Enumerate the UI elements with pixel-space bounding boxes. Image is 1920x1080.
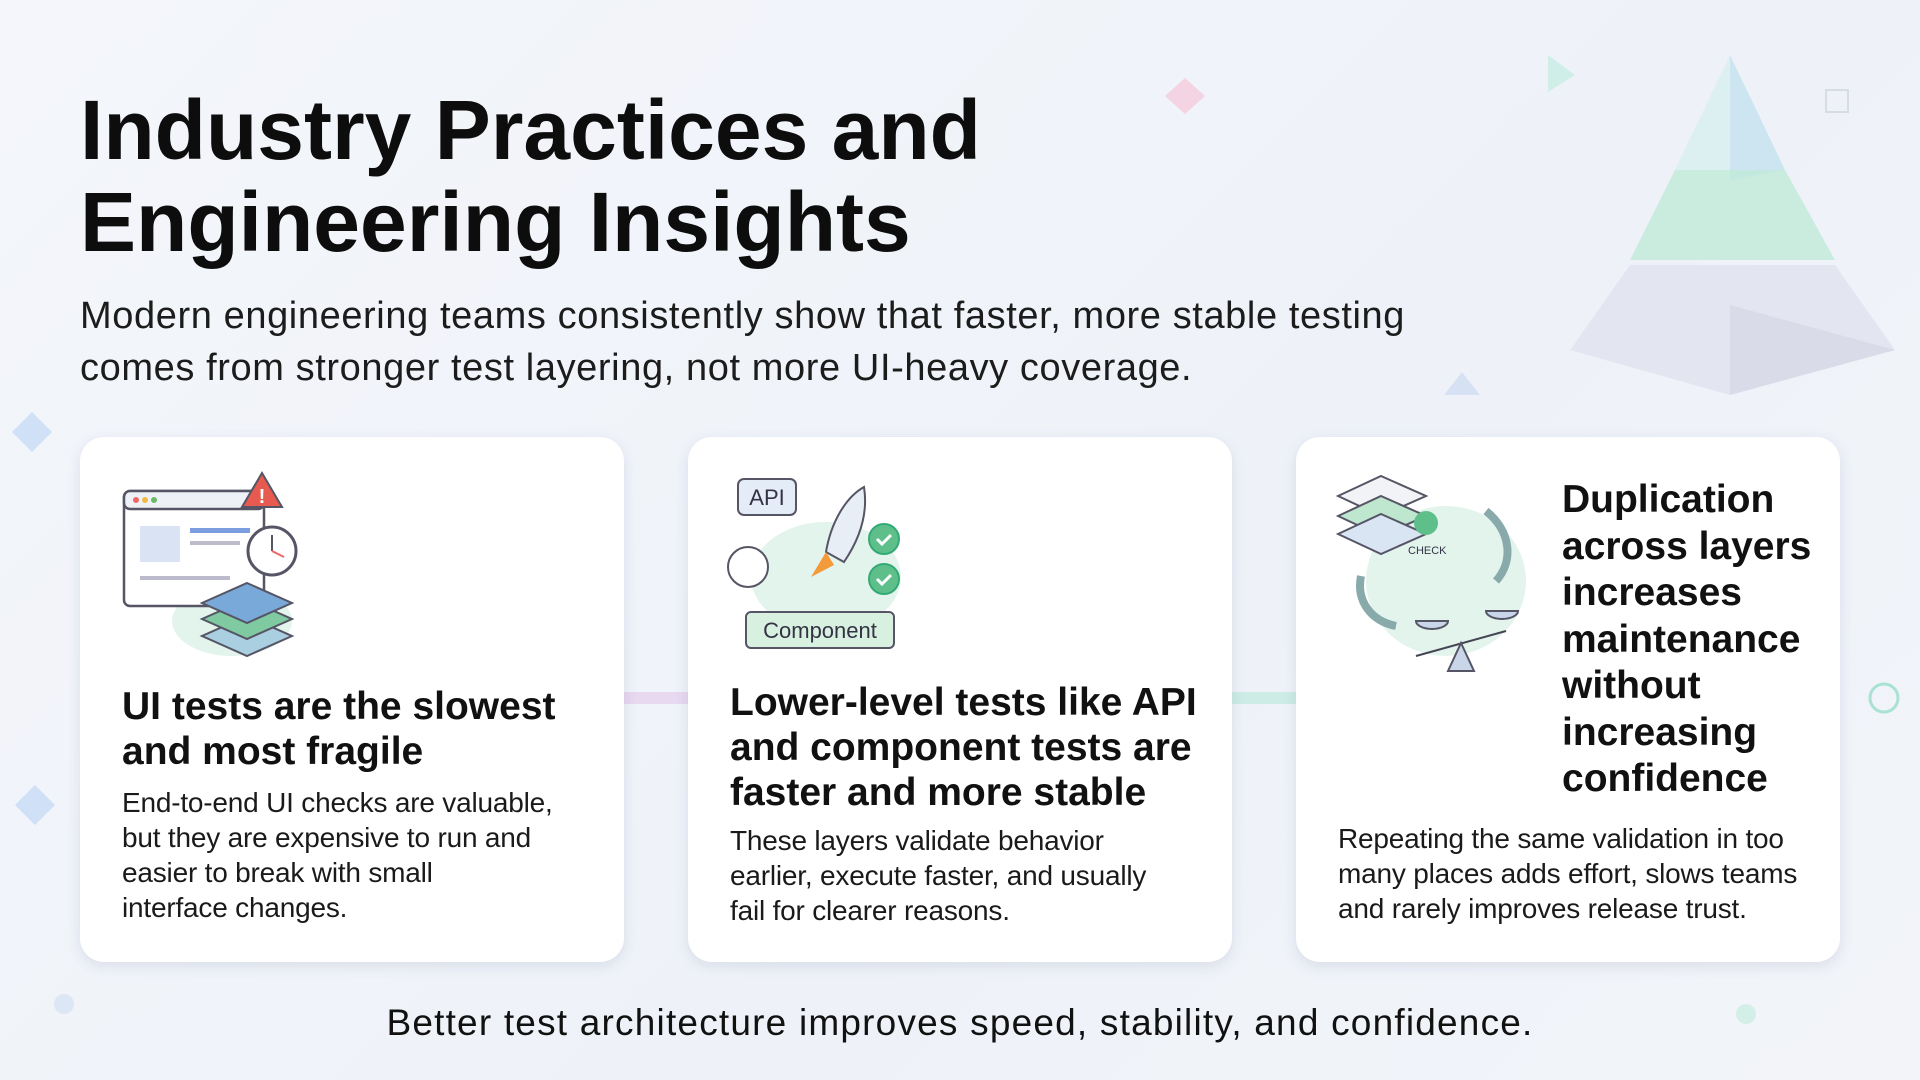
heading: confidence (1562, 757, 1768, 800)
icon: API rocket component: API (749, 485, 785, 510)
heading: increasing (1562, 710, 1757, 754)
heading: increases (1562, 571, 1742, 614)
icon: browser with warning and stacked layers: ! (259, 486, 265, 508)
body text: End-to-end UI checks are valuable, (122, 787, 553, 818)
heading: faster and more stable (730, 771, 1146, 814)
decorative pyramid (1570, 55, 1895, 395)
footer statement: Better test architecture improves speed, stability, and confidence. (386, 1002, 1534, 1043)
body text (122, 787, 553, 923)
body text: but they are expensive to run and (122, 822, 531, 853)
panel: duplication (1296, 437, 1840, 962)
body text: Repeating the same validation in too (1338, 823, 1784, 854)
title (80, 83, 981, 269)
subtitle: comes from stronger test layering, not more UI-heavy coverage. (80, 347, 1192, 389)
heading: maintenance (1562, 618, 1800, 660)
body text: and rarely improves release trust. (1338, 893, 1747, 924)
heading: Lower-level tests like API (730, 681, 1197, 724)
panel: lower-level tests (688, 437, 1232, 962)
subtitle: Modern engineering teams consistently show that faster, more stable testing (80, 295, 1405, 337)
icon: code layers with cycle and scales (1336, 474, 1526, 672)
icon: API rocket component: Component (763, 618, 877, 643)
title: Industry Practices and (80, 83, 981, 177)
title: Engineering Insights (80, 175, 911, 269)
heading (122, 685, 556, 773)
body text (730, 825, 1146, 926)
panel: UI tests (80, 437, 624, 962)
subtitle (80, 295, 1405, 389)
icon: API rocket component (727, 478, 901, 649)
body text (1338, 823, 1797, 924)
heading: UI tests are the slowest (122, 685, 556, 728)
body text: interface changes. (122, 892, 347, 923)
heading: without (1562, 664, 1701, 707)
heading (730, 681, 1197, 814)
heading (1562, 478, 1811, 800)
heading: and most fragile (122, 730, 423, 773)
heading: across layers (1562, 524, 1811, 568)
heading: Duplication (1562, 478, 1774, 521)
icon: code layers with cycle and scales: CHECK (1408, 545, 1447, 557)
body text: These layers validate behavior (730, 825, 1104, 856)
body text: fail for clearer reasons. (730, 895, 1010, 926)
icon: browser with warning and stacked layers (122, 471, 298, 658)
body text: earlier, execute faster, and usually (730, 860, 1146, 891)
body text: many places adds effort, slows teams (1338, 858, 1797, 889)
body text: easier to break with small (122, 857, 433, 888)
heading: and component tests are (730, 726, 1192, 769)
